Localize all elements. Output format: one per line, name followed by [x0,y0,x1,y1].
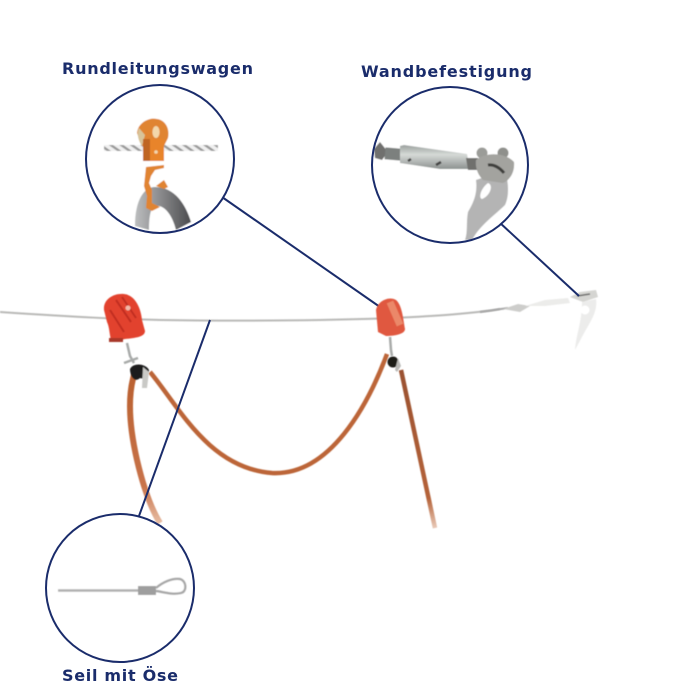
heading: Wandbefestigung: Wandbefestigung [361,62,532,81]
circle outline: Rundleitungswagen [86,85,234,233]
right hanging cable end [401,370,435,528]
heading: Seil mit Öse: Seil mit Öse [62,666,178,685]
turnbuckle wall fixing on the rope [480,290,598,350]
metal hook [124,343,138,363]
orange trolley [137,119,168,211]
circle outline: Seil mit Öse [46,514,194,662]
orange cable loop between trolleys [130,354,435,528]
black clamp [388,356,398,368]
wire with eyelet [58,579,185,595]
leader line: wall fixing circle to turnbuckle [499,222,579,296]
turnbuckle body [374,142,514,183]
circle background [372,87,528,243]
orange hook [144,165,164,211]
circle: Seil mit Öse detail [46,514,194,662]
wire rope [104,145,218,151]
trolley body [104,294,145,342]
leader line: trolley circle to right trolley [222,197,380,307]
grey cable arch [135,187,191,230]
leader line: rope to eyelet circle [139,320,210,516]
metal hook [390,337,392,356]
circle: Wandbefestigung detail [372,87,528,243]
circle background [46,514,194,662]
faded eye shadow [575,299,596,350]
heading: Rundleitungswagen: Rundleitungswagen [62,59,253,78]
sagging cable [150,354,387,473]
eye shadow [465,170,508,240]
circle: Rundleitungswagen detail [86,85,234,233]
black clamp [130,365,149,380]
left red trolley with clamp [104,294,149,388]
circle background [86,85,234,233]
trolley body [376,298,405,336]
main steel rope [0,309,500,321]
right red trolley with clamp [376,298,405,372]
circle outline: Wandbefestigung [372,87,528,243]
left hanging cable end [130,372,160,523]
